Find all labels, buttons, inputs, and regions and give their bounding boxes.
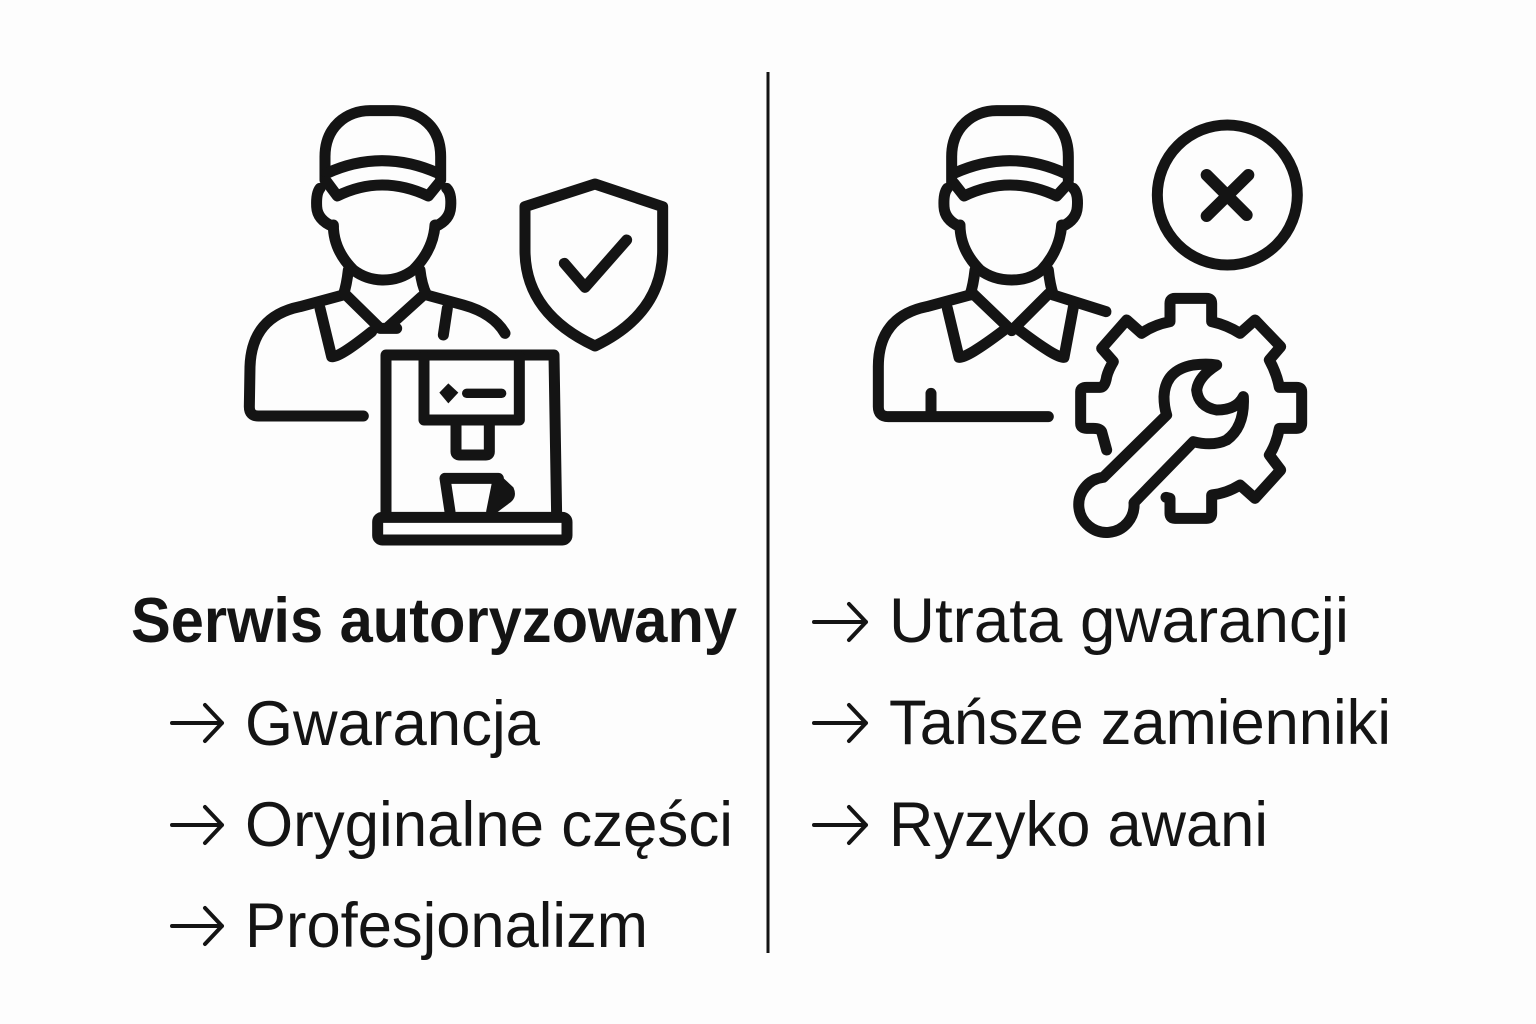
center divider: [766, 72, 770, 953]
icon: technician with x and gear wrench: [878, 111, 1302, 532]
heading: Serwis autoryzowany: [131, 586, 737, 656]
list item: Tańsze zamienniki: Tańsze zamienniki: [889, 688, 1391, 758]
icon: wrench: [1079, 364, 1243, 532]
icon: technician: [249, 111, 505, 416]
icon: x in circle: [1157, 125, 1297, 265]
list item: Utrata gwarancji: Utrata gwarancji: [889, 586, 1349, 656]
icon: gear: [1081, 298, 1302, 518]
list item: Gwarancja: Gwarancja: [245, 689, 541, 759]
panel: independent service: [814, 111, 1391, 860]
list item: Ryzyko awani: Ryzyko awani: [889, 790, 1268, 860]
icon: coffee machine: [378, 355, 567, 540]
list item: Oryginalne części: Oryginalne części: [245, 790, 733, 860]
icon: shield with check: [525, 184, 663, 346]
icon: technician: [878, 111, 1106, 417]
icon: technician with coffee machine and shield: [249, 111, 663, 540]
list item: Profesjonalizm: Profesjonalizm: [245, 891, 648, 961]
panel: authorized service: [131, 111, 737, 961]
